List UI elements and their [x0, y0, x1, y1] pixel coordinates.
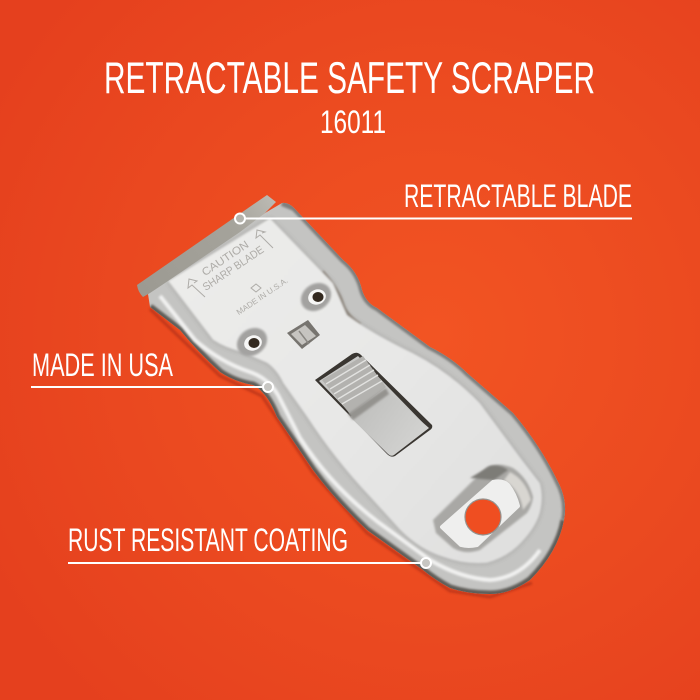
engraved diamond [251, 284, 261, 292]
blade [137, 195, 276, 297]
engraved sharp blade text: SHARP BLADE [201, 244, 266, 294]
slider lower plate [350, 392, 429, 456]
model number: 16011 [320, 104, 386, 140]
callout: retractable blade [235, 178, 632, 224]
rivet left [231, 322, 273, 362]
engraved arrows [188, 230, 273, 297]
rivet right [295, 277, 337, 317]
callout: made in usa [31, 347, 273, 392]
engraved caution text: CAUTION [200, 239, 251, 279]
callout: rust resistant coating [68, 522, 431, 568]
small blade window [287, 320, 320, 349]
slider window [315, 353, 432, 457]
product: retractable safety scraper [137, 195, 565, 597]
top plate [168, 218, 542, 563]
slider ridges [326, 360, 382, 404]
scraper body [148, 203, 565, 594]
rim highlight, lower left [160, 296, 540, 580]
hanging hole tab [433, 465, 533, 552]
dark crease on neck [322, 272, 360, 325]
hole [465, 499, 501, 535]
outer edge shading, upper right [282, 203, 565, 520]
slider step [348, 388, 389, 420]
callout: made in usa: MADE IN USA [32, 347, 173, 383]
cast shadow [150, 309, 532, 597]
callout: rust resistant coating: RUST RESISTANT COATING [68, 522, 348, 558]
slider ridged thumb [322, 356, 386, 414]
outer edge shading, lower left [150, 307, 564, 594]
engraved maker mark: MADE IN U.S.A. [235, 276, 290, 317]
groove shadow [168, 218, 542, 563]
